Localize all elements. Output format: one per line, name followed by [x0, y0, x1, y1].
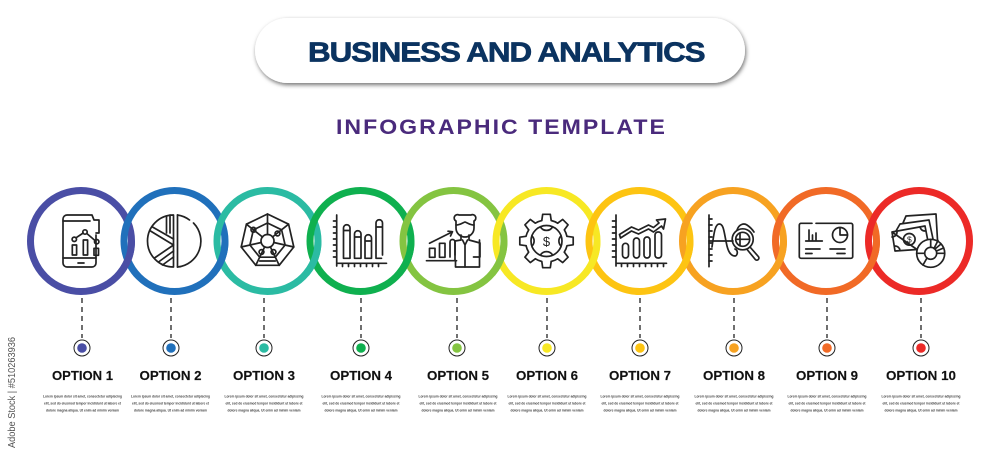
icon: curve with magnifier [709, 215, 759, 267]
description 1: elit, sed do eiusmod tempor incididunt ut labore et [44, 401, 122, 405]
description 4: Lorem ipsum dolor sit amet, consectetur adipiscing [322, 394, 400, 398]
connector 3 [263, 298, 265, 338]
marker 5 [449, 340, 465, 356]
description 6: dolore magna aliqua. Ut enim ad minim veniam [510, 408, 584, 412]
ring 2 [124, 190, 225, 292]
description 3: elit, sed do eiusmod tempor incididunt ut labore et [226, 401, 303, 405]
title pill [255, 18, 745, 83]
description 2: dolore magna aliqua. Ut enim ad minim veniam [134, 408, 207, 412]
description 4: dolore magna aliqua. Ut enim ad minim veniam [324, 408, 398, 412]
marker 8 [726, 340, 742, 356]
label 6: OPTION 6 [516, 368, 578, 383]
ring 5 [403, 190, 504, 292]
label 5: OPTION 5 [427, 368, 489, 383]
description 10: Lorem ipsum dolor sit amet, consectetur adipiscing [882, 394, 960, 398]
description 6: Lorem ipsum dolor sit amet, consectetur adipiscing [508, 394, 586, 398]
label 3: OPTION 3 [233, 368, 295, 383]
description 6: elit, sed do eiusmod tempor incididunt ut labore et [508, 401, 586, 405]
description 7: elit, sed do eiusmod tempor incididunt ut labore et [602, 401, 679, 405]
marker 7 [632, 340, 648, 356]
description 5: dolore magna aliqua. Ut enim ad minim veniam [422, 408, 494, 412]
description 8 [694, 394, 774, 412]
description 7: dolore magna aliqua. Ut enim ad minim veniam [604, 408, 676, 412]
ring 4 [310, 190, 411, 292]
icon: money and donut chart [892, 214, 945, 267]
connector 8 [733, 298, 735, 338]
description 9 [788, 394, 866, 412]
label 9: OPTION 9 [796, 368, 858, 383]
option 8 [682, 190, 784, 412]
connector 5 [456, 298, 458, 338]
icon: growth chart [612, 215, 666, 266]
description 10 [882, 394, 960, 412]
label 1: OPTION 1 [52, 368, 113, 383]
connector 6 [546, 298, 548, 338]
icon: gear with dollar: $ [543, 234, 551, 249]
description 8: Lorem ipsum dolor sit amet, consectetur adipiscing [694, 394, 774, 398]
description 2 [131, 394, 210, 412]
ring 7 [589, 190, 690, 292]
ring 1 [30, 190, 132, 292]
description 1: Lorem ipsum dolor sit amet, consectetur adipiscing [43, 394, 122, 398]
marker 6 [539, 340, 555, 356]
ring 6 [496, 190, 597, 292]
icon: dashboard card [799, 223, 853, 258]
option 5 [403, 190, 504, 412]
ring 9 [776, 190, 876, 292]
label 10: OPTION 10 [886, 368, 956, 383]
option 3 [217, 190, 318, 412]
description 9: Lorem ipsum dolor sit amet, consectetur adipiscing [788, 394, 866, 398]
connector 9 [826, 298, 828, 338]
description 1: dolore magna aliqua. Ut enim ad minim veniam [46, 408, 119, 412]
description 3: Lorem ipsum dolor sit amet, consectetur adipiscing [224, 394, 304, 398]
option 9 [776, 190, 876, 412]
description 9: elit, sed do eiusmod tempor incididunt ut labore et [788, 401, 866, 405]
stock credit: Adobe Stock | #510263936 [6, 337, 18, 448]
option 6 [496, 190, 597, 412]
title: BUSINESS AND ANALYTICS [308, 37, 706, 68]
ring interlock overlaps [120, 241, 876, 274]
connector 10 [920, 298, 922, 338]
label 7: OPTION 7 [609, 368, 671, 383]
icon: gear with dollar [520, 214, 573, 268]
description 8: dolore magna aliqua. Ut enim ad minim veniam [698, 408, 770, 412]
description 4: elit, sed do eiusmod tempor incididunt ut labore et [322, 401, 400, 405]
icon: radar web [241, 214, 294, 265]
description 6 [508, 394, 586, 412]
description 2: elit, sed do eiusmod tempor incididunt ut labore et [132, 401, 210, 405]
ring 10 [868, 190, 970, 292]
subtitle: INFOGRAPHIC TEMPLATE [336, 115, 665, 139]
marker 10 [913, 340, 929, 356]
label 2: OPTION 2 [140, 368, 202, 383]
description 2: Lorem ipsum dolor sit amet, consectetur adipiscing [131, 394, 210, 398]
description 4 [322, 394, 400, 412]
description 5: elit, sed do eiusmod tempor incididunt ut labore et [420, 401, 497, 405]
description 3: dolore magna aliqua. Ut enim ad minim veniam [228, 408, 300, 412]
description 10: dolore magna aliqua. Ut enim ad minim veniam [884, 408, 958, 412]
connector 1 [81, 298, 83, 338]
icon: phone analytics [63, 215, 99, 267]
icon: money and donut chart: $ [907, 235, 912, 245]
marker 2 [163, 340, 179, 356]
marker 3 [256, 340, 272, 356]
ring 8 [682, 190, 784, 292]
ring 3 [217, 190, 318, 292]
description 5: Lorem ipsum dolor sit amet, consectetur adipiscing [418, 394, 498, 398]
icon: bar chart [334, 215, 386, 266]
description 3 [224, 394, 304, 412]
description 7 [600, 394, 680, 412]
option 2 [124, 190, 225, 412]
description 8: elit, sed do eiusmod tempor incididunt ut labore et [696, 401, 773, 405]
marker 9 [819, 340, 835, 356]
connector 4 [360, 298, 362, 338]
description 5 [418, 394, 498, 412]
description 1 [43, 394, 122, 412]
connector 7 [639, 298, 641, 338]
description 7: Lorem ipsum dolor sit amet, consectetur adipiscing [600, 394, 680, 398]
marker 4 [353, 340, 369, 356]
option 10 [868, 190, 970, 412]
option 4 [310, 190, 411, 412]
icon: pie chart [148, 215, 201, 267]
description 9: dolore magna aliqua. Ut enim ad minim veniam [790, 408, 864, 412]
connector 2 [170, 298, 172, 338]
label 8: OPTION 8 [703, 368, 765, 383]
option 1 [30, 190, 132, 412]
label 4: OPTION 4 [330, 368, 393, 383]
marker 1 [74, 340, 90, 356]
description 10: elit, sed do eiusmod tempor incididunt ut labore et [882, 401, 960, 405]
option 7 [589, 190, 690, 412]
icon: businessman with growth chart [426, 215, 480, 267]
